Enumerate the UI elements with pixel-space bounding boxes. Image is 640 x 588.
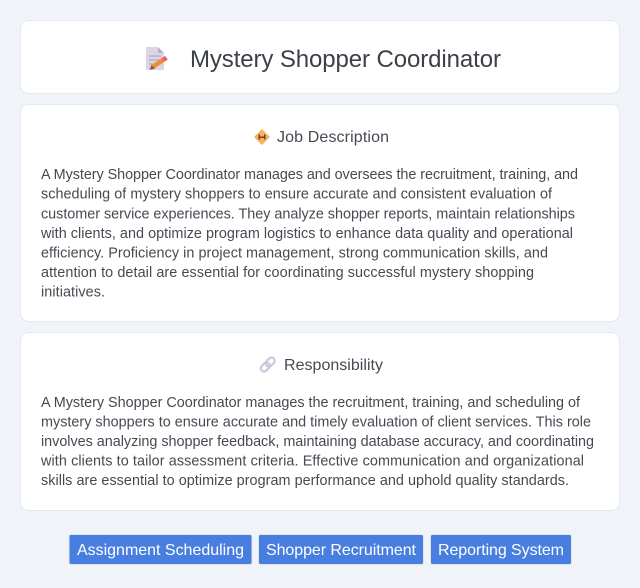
icon: document with pencil	[146, 47, 166, 70]
body text: job description: A Mystery Shopper Coordinator manages and oversees the recruitment, training, and	[41, 167, 578, 183]
tag: reporting system: Reporting System	[438, 542, 564, 559]
icon: orange diamond	[254, 129, 270, 145]
body text: responsibility: involves analyzing shopper feedback, maintaining database accuracy, and coordinating	[41, 434, 594, 450]
tag: shopper recruitment: Shopper Recruitment	[266, 542, 417, 559]
heading: job description: Job Description	[277, 129, 389, 146]
tag: reporting system	[430, 534, 572, 564]
icon: chain link	[259, 356, 276, 373]
title text: Mystery Shopper Coordinator	[190, 46, 501, 73]
panel: responsibility	[20, 332, 620, 510]
body text: job description: with clients, and optimize program logistics to enhance data quality and operational	[40, 226, 573, 242]
body text: job description: attention to detail are essential for coordinating successful mystery shopping	[41, 265, 534, 281]
panel: job description	[20, 104, 620, 322]
tag: assignment scheduling: Assignment Scheduling	[77, 542, 244, 559]
panel: title	[20, 20, 620, 94]
body text: responsibility: skills are essential to optimize program performance and uphold quality standards.	[41, 473, 569, 489]
body text: responsibility: with clients to tailor assessment criteria. Effective communication and organizational	[40, 454, 584, 470]
body text: job description: efficiency. Proficiency in project management, strong communication skills, and	[41, 246, 548, 262]
body text: job description: initiatives.	[41, 284, 105, 300]
heading: responsibility: Responsibility	[284, 357, 383, 374]
body text: responsibility	[40, 395, 594, 489]
tag: shopper recruitment	[258, 534, 424, 564]
tag: assignment scheduling	[69, 534, 252, 564]
body text: job description	[40, 167, 578, 300]
body text: responsibility: mystery shoppers to ensure accurate and timely evaluation of client services. This role	[41, 414, 591, 430]
body text: job description: scheduling of mystery shoppers to ensure accurate and consistent evaluation of	[41, 186, 553, 202]
body text: job description: customer service experiences. They analyze shopper reports, maintain relationships	[41, 206, 575, 222]
body text: responsibility: A Mystery Shopper Coordinator manages the recruitment, training, and scheduling of	[41, 395, 581, 411]
